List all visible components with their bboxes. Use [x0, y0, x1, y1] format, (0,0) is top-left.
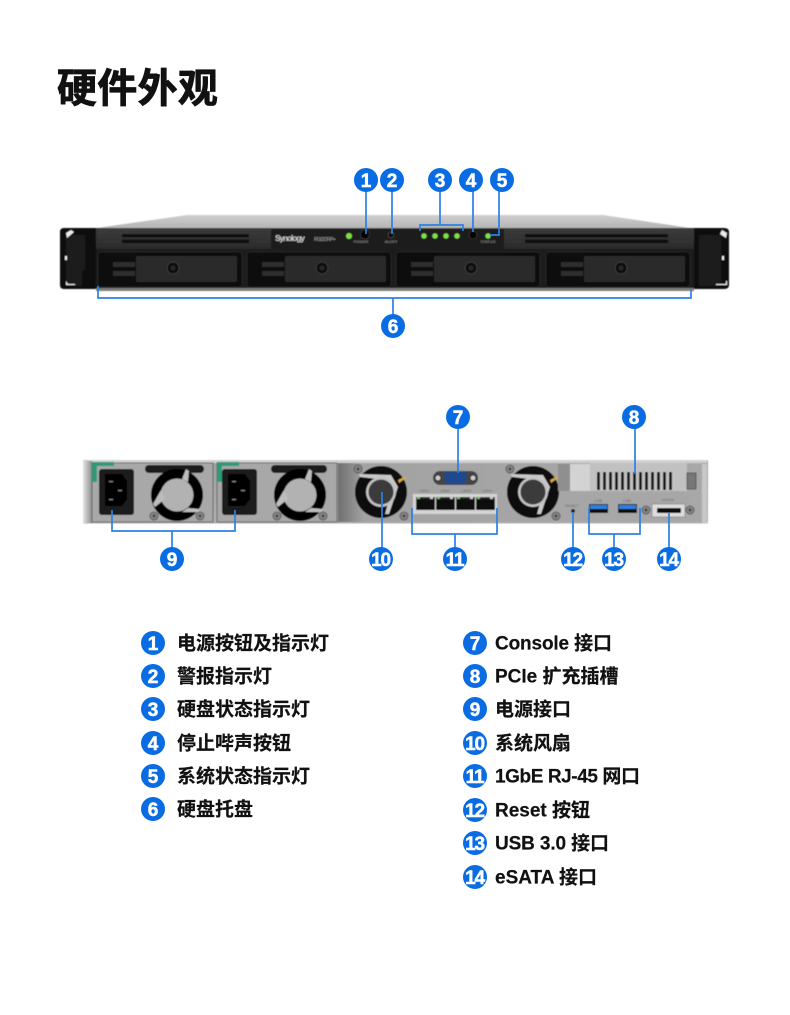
badge 11: 11 — [446, 550, 465, 571]
eSATA port — [652, 497, 694, 517]
badge 2 — [380, 168, 404, 192]
model label: RS820RP+ — [314, 237, 336, 243]
badge 8 — [622, 405, 646, 429]
legend item 7: 7 — [470, 634, 480, 655]
badge 7 — [446, 405, 470, 429]
badge 5: 5 — [497, 171, 508, 192]
right edge of chassis — [702, 464, 707, 523]
legend item 6 — [141, 797, 253, 821]
badge 12 — [561, 547, 585, 571]
legend item 9: 电源接口 — [495, 698, 571, 720]
legend item 12: Reset 按钮 — [495, 798, 590, 822]
badge 13 — [602, 547, 626, 571]
title: 硬件外观 — [57, 67, 218, 111]
LAN block: LAN2 — [440, 488, 451, 493]
status LEDs and buttons: ALERT — [385, 239, 398, 244]
LAN block: LAN3 — [461, 488, 472, 493]
legend item 3: 3 — [148, 700, 158, 721]
badge 14 — [657, 547, 681, 571]
legend item 14: 14 — [465, 868, 485, 889]
reset hole: RESET — [565, 503, 579, 508]
badge 6 — [381, 314, 405, 338]
legend item 2: 2 — [148, 667, 158, 688]
front view of NAS — [60, 215, 729, 291]
legend item 10 — [463, 731, 571, 755]
right rack bracket — [693, 228, 729, 289]
main rear panel — [338, 463, 706, 522]
badge 11 — [443, 547, 467, 571]
PCIe slot cover — [558, 463, 696, 491]
badge 4: 4 — [466, 171, 477, 192]
legend item 9: 9 — [470, 700, 480, 721]
eSATA port: eSATA — [662, 497, 674, 502]
USB ports: USB — [594, 498, 602, 503]
reset hole — [565, 503, 579, 513]
legend item 2: 警报指示灯 — [177, 666, 272, 688]
PSU 1 — [92, 462, 213, 522]
system fan left — [355, 466, 407, 518]
drive tray 1 — [98, 252, 242, 287]
badge 5 — [490, 168, 514, 192]
chassis top surface — [97, 215, 690, 228]
badge 8: 8 — [629, 408, 639, 429]
badge 4 — [459, 168, 483, 192]
callout badges on the diagrams — [160, 168, 681, 571]
drive tray 3 — [396, 252, 540, 287]
legend item 13: 13 — [465, 834, 484, 855]
legend item 5: 5 — [148, 767, 159, 788]
legend item 12: 12 — [465, 801, 484, 822]
legend item 3 — [141, 697, 310, 721]
legend item 3: 硬盘状态指示灯 — [177, 698, 310, 720]
legend item 13 — [463, 831, 609, 855]
console port — [433, 471, 478, 485]
legend item 13: USB 3.0 接口 — [495, 832, 609, 854]
LAN block: LAN4 — [482, 488, 493, 493]
badge 13: 13 — [604, 550, 623, 571]
badge 7: 7 — [453, 408, 463, 429]
legend item 6: 硬盘托盘 — [177, 798, 253, 820]
legend item 8 — [463, 664, 619, 688]
LAN block — [413, 488, 497, 514]
legend item 1: 1 — [148, 634, 159, 655]
badge 1 — [354, 168, 378, 192]
USB ports: USB — [623, 498, 631, 503]
legend left column — [141, 631, 329, 821]
left rack bracket — [60, 228, 97, 289]
badge 3: 3 — [435, 171, 445, 192]
legend item 5 — [141, 764, 310, 788]
badge 9: 9 — [167, 550, 177, 571]
badge 2: 2 — [387, 171, 397, 192]
legend item 11: 11 — [466, 767, 485, 788]
legend item 14 — [463, 865, 597, 889]
badge 10: 10 — [371, 550, 390, 571]
legend item 4: 4 — [148, 734, 159, 755]
legend item 11: 1GbE RJ-45 网口 — [495, 766, 640, 788]
legend item 1: 电源按钮及指示灯 — [177, 632, 329, 654]
badge 1: 1 — [361, 171, 372, 192]
legend item 4 — [141, 731, 291, 755]
legend item 8: PCIe 扩充插槽 — [495, 664, 619, 688]
legend item 4: 停止哔声按钮 — [177, 732, 291, 754]
chassis front face — [96, 228, 694, 291]
legend item 7 — [463, 631, 612, 655]
badge 9 — [160, 547, 184, 571]
badge 14: 14 — [659, 550, 679, 571]
PSU 2 — [217, 462, 337, 522]
legend item 2 — [141, 664, 272, 688]
legend item 8: 8 — [470, 667, 480, 688]
USB ports — [589, 498, 650, 514]
drive tray 2 — [247, 252, 391, 287]
legend item 12 — [463, 798, 590, 822]
legend item 7: Console 接口 — [495, 632, 612, 654]
status LEDs and buttons: STATUS — [480, 239, 496, 244]
status LEDs and buttons: POWER — [353, 239, 369, 244]
LAN block: LAN1 — [419, 488, 430, 493]
rear chassis — [83, 460, 708, 524]
legend item 14: eSATA 接口 — [495, 866, 597, 888]
legend item 6: 6 — [148, 800, 158, 821]
legend item 10: 系统风扇 — [495, 732, 571, 754]
badge 6: 6 — [388, 317, 398, 338]
drive tray 4 — [546, 252, 690, 287]
badge 12: 12 — [563, 550, 582, 571]
left vent — [122, 234, 249, 243]
callout leader lines — [98, 190, 691, 549]
rear view of NAS — [83, 460, 708, 524]
legend item 9 — [463, 697, 571, 721]
badge 3 — [428, 168, 452, 192]
badge 10 — [369, 547, 393, 571]
legend item 5: 系统状态指示灯 — [177, 764, 310, 788]
right vent — [525, 234, 668, 243]
system fan right — [507, 466, 559, 518]
status LEDs and buttons — [346, 230, 496, 244]
brand label: Synology — [275, 233, 305, 243]
legend item 10: 10 — [465, 734, 484, 755]
legend right column — [463, 631, 640, 889]
